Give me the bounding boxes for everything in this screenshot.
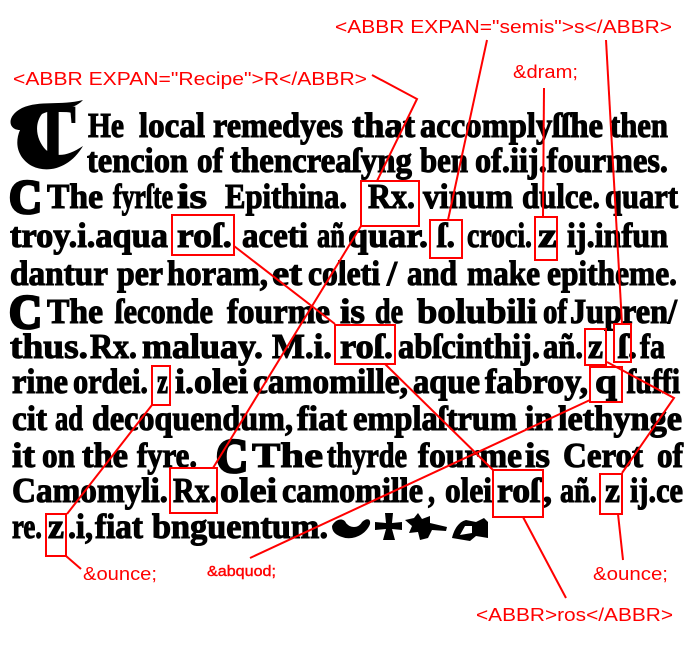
text line 7: M.i.: [272, 327, 332, 366]
text line 6: Jupren/: [570, 292, 678, 331]
callout: ros label: <ABBR>ros</ABBR>: [476, 605, 673, 625]
text line 9: lethynge: [558, 399, 682, 438]
text line 6: bolubili: [417, 292, 537, 331]
text line 11: Rx.: [173, 471, 217, 510]
text line 10: of: [657, 436, 683, 475]
text line 9: [12, 399, 682, 438]
ornament: whale: [332, 519, 370, 538]
callout: ounce label left: &ounce;: [83, 564, 157, 584]
text line 10: on: [42, 436, 75, 475]
text line 8: z: [157, 362, 168, 401]
text line 12: .i,: [68, 507, 93, 546]
text line 10: Cerot: [563, 436, 643, 475]
blackletter text block: [9, 88, 683, 546]
text line 4: quar.: [348, 216, 428, 255]
text line 3: vinum: [423, 177, 513, 216]
text line 5: horam,: [167, 254, 268, 293]
text line 5: and: [407, 254, 457, 293]
text line 8: [12, 362, 680, 401]
text line 4: z: [538, 216, 557, 255]
text line 2: tencion: [87, 141, 188, 180]
text line 7: abſcinthij.: [398, 327, 540, 366]
text line 10: [12, 430, 683, 483]
text line 8: camomille,: [253, 362, 408, 401]
text line 7: fa: [640, 327, 665, 366]
text line 3: fyrſte: [113, 177, 173, 216]
text line 6: The: [47, 292, 103, 331]
text line 5: per: [117, 254, 163, 293]
text line 3: is: [177, 177, 207, 216]
text line 2: of: [197, 141, 223, 180]
text line 4: ſ.: [437, 216, 455, 255]
text line 6: [9, 286, 678, 339]
text line 6: C: [9, 286, 42, 339]
text line 11: Camomyli.: [12, 471, 168, 510]
text line 12: z: [48, 507, 64, 546]
text line 11: olei: [220, 471, 277, 510]
text line 1: that: [352, 106, 415, 145]
text line 3: quart: [605, 177, 678, 216]
text line 2: [87, 141, 668, 180]
text line 8: i.olei: [175, 362, 248, 401]
text line 4: ij.infun: [567, 216, 668, 255]
text line 1: [88, 106, 668, 145]
text line 10: fyre.: [137, 436, 197, 475]
text line 11: z: [605, 471, 620, 510]
text line 6: of: [543, 292, 567, 331]
red connector lines: [66, 40, 674, 598]
printer's ornaments: [332, 513, 488, 541]
text line 2: ben: [420, 141, 468, 180]
text line 4: croci.: [467, 216, 532, 255]
text line 6: is: [340, 292, 365, 331]
text line 11: añ.: [560, 471, 597, 510]
text line 1: accomplyſſhe: [420, 106, 603, 145]
text line 8: rine: [12, 362, 68, 401]
text line 3: C: [9, 171, 42, 224]
text line 10: thyrde: [327, 436, 407, 475]
text line 9: emplaſtrum: [353, 399, 517, 438]
text line 7: ſ.: [618, 327, 637, 366]
text line 6: de: [375, 292, 403, 331]
text line 11: ij.ce: [630, 471, 683, 510]
text line 4: aceti: [242, 216, 308, 255]
callout: abquod label: &abquod;: [207, 563, 276, 580]
text line 10: is: [525, 436, 550, 475]
text line 7: roſ.: [340, 327, 393, 366]
text line 12: re.: [12, 507, 42, 546]
text line 10: fourme: [418, 436, 522, 475]
text line 12: fiat: [95, 507, 143, 546]
text line 7: añ.: [543, 327, 583, 366]
callout: ounce label right: &ounce;: [593, 564, 668, 584]
ornament: cross: [375, 513, 402, 540]
text line 2: thencreaſyng: [230, 141, 412, 180]
text line 11: roſ: [497, 471, 542, 510]
text line 9: in: [525, 399, 553, 438]
text line 10: C: [216, 430, 248, 483]
text line 6: ſeconde: [115, 292, 213, 331]
text line 5: [10, 254, 677, 293]
text line 9: decoquendum,: [92, 399, 293, 438]
callout: dram label: &dram;: [513, 62, 578, 82]
text line 10: it: [12, 436, 35, 475]
text line 7: [10, 327, 665, 366]
text line 11: ,: [543, 471, 552, 510]
ornament: hand: [452, 518, 488, 541]
text line 5: make: [467, 254, 540, 293]
drop cap T: T: [30, 88, 76, 181]
text line 9: ad: [55, 399, 83, 438]
text line 7: Rx.: [90, 327, 137, 366]
ornament: flower: [405, 513, 447, 540]
text line 7: z: [588, 327, 603, 366]
text line 8: ſuffi: [627, 362, 680, 401]
text line 12: bnguentum.: [152, 507, 328, 546]
text line 2: of.iij.fourmes.: [475, 141, 668, 180]
text line 11: ,: [428, 471, 435, 510]
text line 3: dulce.: [522, 177, 600, 216]
text line 3: The: [47, 177, 103, 216]
text line 5: et: [272, 254, 302, 293]
text line 1: He: [88, 106, 124, 145]
text line 9: cit: [12, 399, 47, 438]
text line 5: epitheme.: [547, 254, 677, 293]
text line 1: remedyes: [213, 106, 343, 145]
text line 3: Epithina.: [225, 177, 347, 216]
text line 8: q: [595, 362, 618, 401]
text line 4: [10, 216, 668, 255]
text line 12: [12, 507, 328, 546]
text line 11: [12, 471, 683, 510]
text line 11: olei: [445, 471, 492, 510]
text line 9: fiat: [297, 399, 347, 438]
text line 8: aque: [413, 362, 480, 401]
text line 4: troy.i.aqua: [10, 216, 168, 255]
callout: semis label: <ABBR EXPAN="semis">s</ABBR>: [335, 17, 672, 37]
text line 8: fabroy,: [485, 362, 588, 401]
text line 11: camomille: [282, 471, 423, 510]
red highlight boxes: [46, 181, 631, 556]
text line 4: añ: [317, 216, 345, 255]
text line 5: /: [386, 254, 398, 293]
text line 1: local: [139, 106, 205, 145]
text line 3: Rx.: [368, 177, 415, 216]
text line 3: [9, 171, 678, 224]
text line 10: The: [252, 436, 323, 475]
text line 10: the: [82, 436, 128, 475]
text line 7: maluay.: [142, 327, 263, 366]
text line 7: thus.: [10, 327, 88, 366]
text line 5: dantur: [10, 254, 108, 293]
text line 1: then: [610, 106, 668, 145]
text line 8: ordei.: [73, 362, 148, 401]
text line 4: roſ.: [177, 216, 232, 255]
text line 6: fourme: [227, 292, 330, 331]
text line 5: coleti: [308, 254, 380, 293]
callout: recipe label: <ABBR EXPAN="Recipe">R</ABBR>: [13, 69, 367, 89]
